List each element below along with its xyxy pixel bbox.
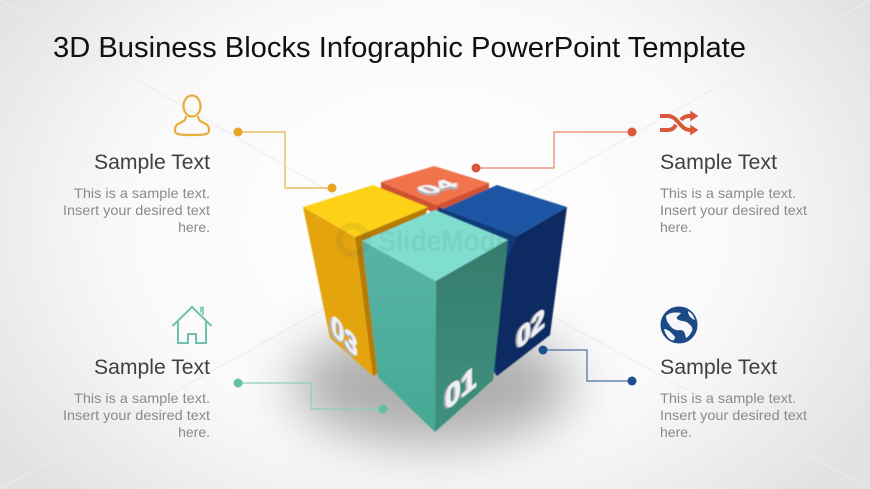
connector: person to block 03 [234,128,336,192]
number 03: 03 [331,307,358,364]
number 01: 01 [445,358,477,418]
connector: globe to block 02 [538,346,636,386]
icon: house [172,307,212,343]
body [660,390,807,440]
body: here. [178,424,210,440]
number 02: 02 [515,303,543,357]
body [63,390,210,440]
body: Insert your desired text [63,407,210,423]
text block: top left [63,151,210,235]
body: This is a sample text. [74,390,210,406]
heading: Sample Text [660,151,777,174]
number 03: 03 [329,308,356,365]
block 02: blue [436,185,567,376]
body: This is a sample text. [74,185,210,201]
connector: house to block 01 [234,378,388,414]
body: here. [178,219,210,235]
number 02: 02 [517,302,545,356]
block 03: yellow [303,185,428,376]
body: This is a sample text. [660,185,796,201]
title: 3D Business Blocks Infographic PowerPoint Template [53,32,746,64]
connector: shuffle to block 04 [472,128,636,172]
heading: Sample Text [94,151,210,174]
block 04: orange [381,166,489,216]
number 04: 04 [409,180,465,199]
body [63,185,210,235]
body: here. [660,219,692,235]
number 01: 01 [443,359,475,419]
icon: shuffle [660,112,697,134]
watermark: SlideModel [378,225,518,258]
body: Insert your desired text [63,202,210,218]
3D blocks [303,166,567,432]
heading: Sample Text [94,356,210,379]
text block: top right [660,151,807,235]
text block: bottom left [63,356,210,440]
icon: person [175,96,209,135]
body: Insert your desired text [660,407,807,423]
number 04: 04 [409,177,465,196]
text block: bottom right [660,356,807,440]
body: Insert your desired text [660,202,807,218]
icon: globe [662,308,696,342]
block 01: teal [362,210,508,432]
drop shadow under blocks [292,325,572,445]
body [660,185,807,235]
body: here. [660,424,692,440]
body: This is a sample text. [660,390,796,406]
heading: Sample Text [660,356,777,379]
